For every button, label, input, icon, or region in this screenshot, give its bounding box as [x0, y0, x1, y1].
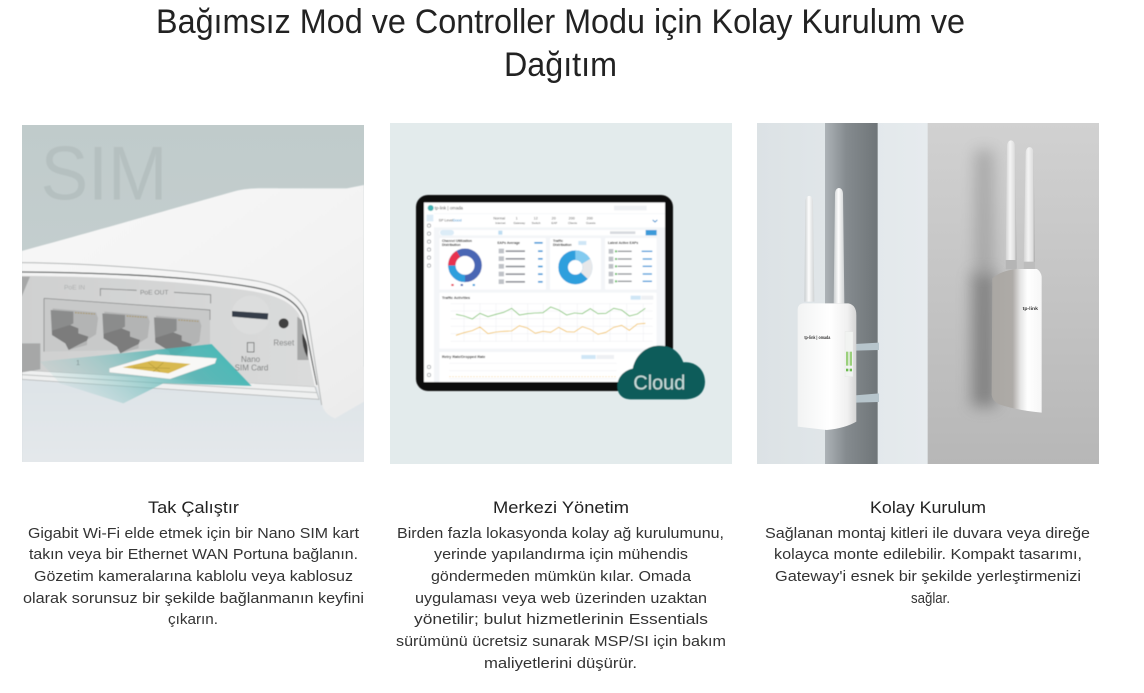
port labels: PoE IN	[64, 284, 85, 291]
description: Birden fazla lokasyonda kolay ağ kurulumunu,	[397, 525, 724, 542]
nano SIM label: Nano	[241, 355, 261, 364]
status bar: Switch	[532, 221, 541, 225]
brand logo: tp-link	[1023, 306, 1038, 311]
title	[156, 3, 965, 84]
description	[396, 525, 726, 672]
port face	[22, 276, 315, 387]
description: çıkarın.	[168, 611, 218, 628]
status bar: Internet	[495, 221, 506, 225]
sidebar	[424, 213, 434, 382]
port labels: PoE OUT	[140, 290, 168, 297]
description: Sağlanan montaj kitleri ile duvara veya direğe	[765, 525, 1090, 542]
status bar: EAP	[551, 221, 557, 225]
nano SIM label: SIM Card	[235, 363, 268, 372]
wall-mounted gateway	[992, 269, 1042, 413]
card: traffic distribution: Distribution	[553, 243, 572, 247]
card: latest active EAPs	[605, 238, 657, 290]
description: yerinde yapılandırma için mühendis	[434, 546, 688, 563]
card: retry and dropped rate chart	[439, 352, 657, 382]
card: retry and dropped rate chart: Retry Rate/Dropped Rate	[442, 355, 485, 359]
port labels: 1	[76, 358, 80, 367]
wall-mounted antennas	[1006, 140, 1035, 269]
power port	[297, 317, 309, 360]
pole straps	[855, 343, 879, 403]
description: kolayca monte edilebilir. Kompakt tasarımı,	[774, 546, 1082, 563]
heading: Kolay Kurulum	[870, 498, 986, 517]
pole-mounted antennas	[804, 188, 844, 303]
dashboard header: tp-link | omada	[435, 206, 464, 211]
column: Kolay Kurulum	[765, 498, 1090, 607]
tab bar	[439, 230, 657, 235]
cloud badge	[617, 346, 705, 399]
card: traffic activities line chart	[439, 293, 657, 349]
status bar: 1	[516, 217, 518, 221]
status bar: 12	[534, 217, 538, 221]
pole-mounted gateway	[798, 303, 856, 430]
description	[23, 525, 364, 628]
status bar: 20	[552, 217, 556, 221]
card: channel utilization: EAPs Average	[497, 241, 520, 245]
status bar: Clients	[568, 221, 578, 225]
Ethernet port 3	[154, 316, 201, 357]
reset button	[273, 318, 295, 347]
wall shadow, upper	[975, 150, 993, 277]
description: olarak sorunsuz bir şekilde bağlanmanın keyfini	[23, 590, 364, 607]
card: latest active EAPs: Latest Active EAPs	[608, 241, 638, 245]
SIM card	[109, 354, 217, 379]
cloud badge: Cloud	[633, 371, 685, 394]
SIM slot area	[232, 310, 269, 320]
tablet frame	[416, 195, 673, 391]
donut chart: traffic	[563, 255, 588, 279]
description: Gateway'i esnek bir şekilde yerleştirmenizi	[775, 568, 1081, 585]
status bar: Good	[453, 219, 462, 223]
heading: Tak Çalıştır	[148, 498, 239, 517]
status bar: Gateway	[513, 221, 526, 225]
nano SIM label	[235, 343, 268, 372]
Ethernet port 1	[51, 308, 98, 350]
description: Gigabit Wi-Fi elde etmek için bir Nano SIM kart	[28, 525, 360, 542]
port frame	[44, 298, 210, 352]
card: traffic activities line chart: Traffic Activities	[442, 296, 470, 300]
description: sürümünü ücretsiz sunarak MSP/SI için bakım	[396, 633, 726, 650]
port labels	[64, 284, 211, 367]
description: Gözetim kameralarına kablolu veya kablosuz	[34, 568, 353, 585]
Ethernet port 2	[102, 312, 150, 353]
panel: mounting photo	[757, 123, 1101, 465]
reset button: Reset	[273, 338, 295, 347]
wall shadow, lower	[972, 273, 997, 407]
status bar: Guests	[586, 221, 596, 225]
column: Tak Çalıştır	[23, 498, 364, 628]
pole	[825, 123, 878, 465]
status bar: Normal	[493, 217, 505, 221]
description: maliyetlerini düşürür.	[484, 655, 637, 672]
description: göndermeden mümkün kılar. Omada	[431, 568, 692, 585]
card: traffic distribution	[550, 238, 601, 290]
panel: cloud dashboard	[390, 123, 732, 464]
title: Dağıtım	[504, 46, 617, 84]
title: Bağımsız Mod ve Controller Modu için Kolay Kurulum ve	[156, 3, 965, 41]
left background	[757, 123, 928, 465]
brand logo: tp-link | omada	[804, 335, 830, 341]
floor	[22, 367, 365, 463]
description: uygulaması veya web üzerinden uzaktan	[415, 590, 707, 607]
status bar: 200	[569, 217, 575, 221]
heading: Merkezi Yönetim	[493, 498, 629, 517]
card: channel utilization: Channel Utilization	[442, 239, 472, 243]
tablet screen	[424, 203, 665, 382]
SIM watermark: SIM	[41, 131, 167, 216]
left recess	[22, 277, 40, 372]
teal wedge	[40, 344, 252, 403]
LED panel	[845, 332, 853, 377]
card: channel utilization: Distribution	[442, 243, 461, 247]
card: channel utilization	[439, 238, 546, 290]
column: Merkezi Yönetim	[396, 498, 726, 672]
description: sağlar.	[911, 590, 950, 607]
description: yönetilir; bulut hizmetlerinin Essentials	[414, 611, 708, 628]
router shell	[22, 185, 364, 418]
right wall	[928, 123, 1101, 465]
status bar	[434, 214, 665, 227]
description	[765, 525, 1090, 607]
description: takın veya bir Ethernet WAN Portuna bağlanın.	[29, 546, 358, 563]
status bar: 200	[587, 217, 593, 221]
donut chart: utilization	[452, 252, 478, 278]
status bar: SP Level	[439, 219, 453, 223]
sill	[22, 370, 319, 399]
dashboard header	[424, 203, 665, 213]
card: traffic distribution: Traffic	[553, 239, 563, 243]
lip lines	[22, 263, 322, 405]
panel: SIM card photo	[22, 125, 365, 463]
